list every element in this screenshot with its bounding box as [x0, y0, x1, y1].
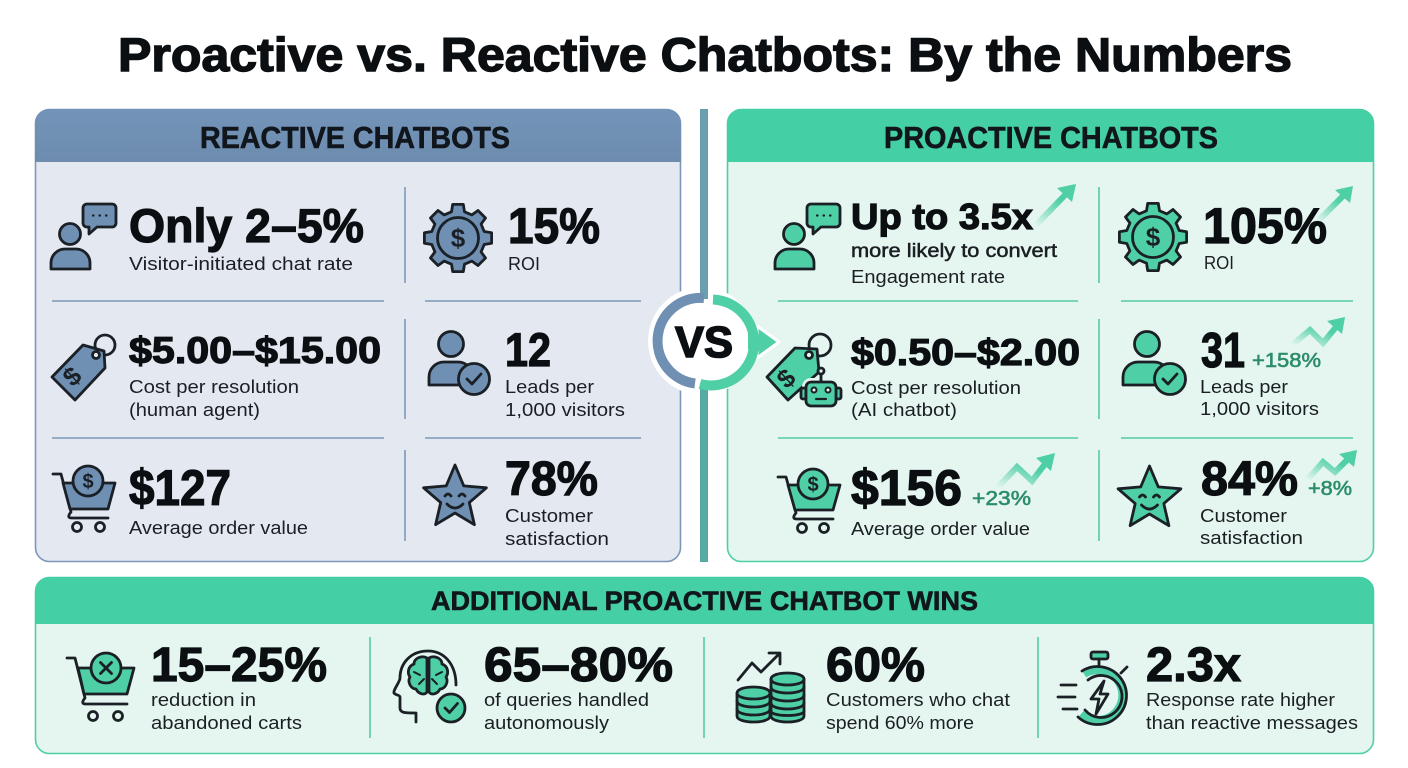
label: Response rate higher	[1146, 689, 1335, 710]
value: Up to 3.5x	[851, 196, 1033, 237]
label: ROI	[1204, 252, 1234, 273]
change: +23%	[972, 488, 1031, 510]
label	[151, 689, 302, 733]
label: Visitor-initiated chat rate	[129, 253, 353, 274]
icon: price tag with robot: $	[771, 362, 802, 394]
value: $127	[129, 460, 231, 516]
label: of queries handled	[484, 689, 649, 710]
sub value: more likely to convert	[851, 240, 1058, 262]
center divider with VS badge	[648, 109, 779, 562]
label: reduction in	[151, 689, 256, 710]
icon: cart with coin: $	[807, 474, 819, 496]
icon: person with chat bubble	[51, 204, 116, 269]
icon: person with chat bubble	[775, 204, 840, 269]
stat: engagement rate	[775, 184, 1076, 287]
reactive header band	[35, 109, 681, 162]
icon: stopwatch with bolt	[1058, 652, 1127, 725]
value: 15–25%	[151, 639, 327, 692]
ring: reactive arc	[658, 298, 704, 384]
value: $156	[851, 460, 962, 516]
stat: leads	[1123, 317, 1345, 419]
label: Cost per resolution	[129, 376, 299, 397]
wins header band	[35, 577, 1374, 624]
label: Customers who chat	[826, 689, 1010, 710]
icon: gear with dollar: $	[451, 223, 466, 253]
label	[129, 376, 299, 420]
label	[1200, 505, 1303, 548]
label: Average order value	[851, 518, 1030, 539]
trend arrow	[997, 453, 1055, 488]
label	[1200, 376, 1319, 419]
label: (human agent)	[129, 399, 260, 420]
icon: person with check	[429, 332, 490, 394]
label	[505, 376, 625, 420]
label: spend 60% more	[826, 712, 974, 733]
label: satisfaction	[505, 528, 609, 549]
stat: customer spend	[737, 639, 1010, 733]
stat: customer satisfaction	[1118, 450, 1357, 548]
stat: cost per resolution human	[52, 330, 381, 420]
icon: gear with dollar	[424, 204, 492, 272]
stat: abandoned carts	[67, 639, 327, 733]
stat: visitor-initiated chat rate	[51, 199, 364, 274]
value: 2.3x	[1146, 639, 1241, 692]
VS text: VS	[675, 318, 733, 367]
icon: cart with coin	[778, 469, 840, 532]
label: Customer	[505, 505, 593, 526]
label	[851, 377, 1021, 420]
trend arrow	[1035, 184, 1076, 226]
value: 60%	[826, 639, 925, 692]
wins heading: ADDITIONAL PROACTIVE CHATBOT WINS	[431, 586, 978, 616]
stat: average order value	[53, 460, 308, 538]
label: autonomously	[484, 712, 610, 733]
label: (AI chatbot)	[851, 399, 957, 420]
stat: ROI	[424, 198, 600, 274]
icon: smiling star	[1118, 466, 1181, 526]
panel: proactive chatbots	[727, 109, 1374, 562]
icon: price tag: $	[57, 360, 88, 392]
change: +158%	[1252, 350, 1321, 372]
value: $0.50–$2.00	[851, 332, 1080, 373]
icon: head with brain and check	[394, 651, 465, 722]
change: +8%	[1308, 478, 1352, 500]
proactive heading: PROACTIVE CHATBOTS	[884, 120, 1218, 155]
title: Proactive vs. Reactive Chatbots: By the Numbers	[118, 28, 1292, 81]
stat: customer satisfaction	[424, 453, 609, 549]
icon: cart with coin	[53, 466, 115, 532]
stat: leads	[429, 323, 625, 420]
value: Only 2–5%	[129, 199, 364, 252]
value: $5.00–$15.00	[129, 330, 381, 371]
trend arrow	[1292, 317, 1345, 345]
stat: average order value	[778, 453, 1055, 539]
stat: queries handled	[394, 639, 673, 733]
value: 78%	[505, 453, 598, 506]
value: 12	[505, 323, 551, 376]
value: 31	[1201, 324, 1245, 378]
icon: cart with x	[67, 653, 134, 720]
label: abandoned carts	[151, 712, 302, 733]
icon: price tag	[52, 335, 115, 400]
label	[1146, 689, 1358, 733]
label: Cost per resolution	[851, 377, 1021, 398]
label: satisfaction	[1200, 527, 1303, 548]
label	[505, 505, 609, 549]
icon: smiling star	[424, 465, 486, 525]
stat: response rate	[1058, 639, 1358, 733]
trend arrow	[1317, 186, 1353, 222]
proactive header band	[727, 109, 1374, 162]
stat: cost per resolution AI	[767, 332, 1080, 420]
label	[484, 689, 649, 733]
label: Engagement rate	[851, 266, 1005, 287]
arrow toward proactive	[748, 326, 779, 358]
icon: gear with dollar	[1119, 203, 1187, 271]
icon: cart with coin: $	[82, 471, 94, 493]
label: Average order value	[129, 517, 308, 538]
value: 15%	[508, 198, 600, 254]
value: 105%	[1203, 198, 1327, 254]
trend arrow	[1307, 450, 1357, 480]
panel: reactive chatbots	[35, 109, 681, 562]
label: 1,000 visitors	[1200, 398, 1319, 419]
reactive heading: REACTIVE CHATBOTS	[200, 120, 510, 155]
icon: price tag with robot	[767, 334, 841, 408]
icon: coins with growth arrow	[737, 653, 804, 722]
label: than reactive messages	[1146, 712, 1358, 733]
panel: additional proactive chatbot wins	[35, 577, 1374, 754]
label: ROI	[508, 253, 540, 274]
icon: gear with dollar: $	[1146, 222, 1161, 252]
label: Leads per	[505, 376, 594, 397]
label: Leads per	[1200, 376, 1288, 397]
icon: person with check	[1123, 332, 1186, 394]
value: 84%	[1201, 453, 1298, 506]
label	[826, 689, 1010, 733]
stat: ROI	[1119, 186, 1353, 273]
value: 65–80%	[484, 639, 673, 692]
ring: proactive arc	[700, 300, 754, 385]
label: Customer	[1200, 505, 1287, 526]
label: 1,000 visitors	[505, 399, 625, 420]
